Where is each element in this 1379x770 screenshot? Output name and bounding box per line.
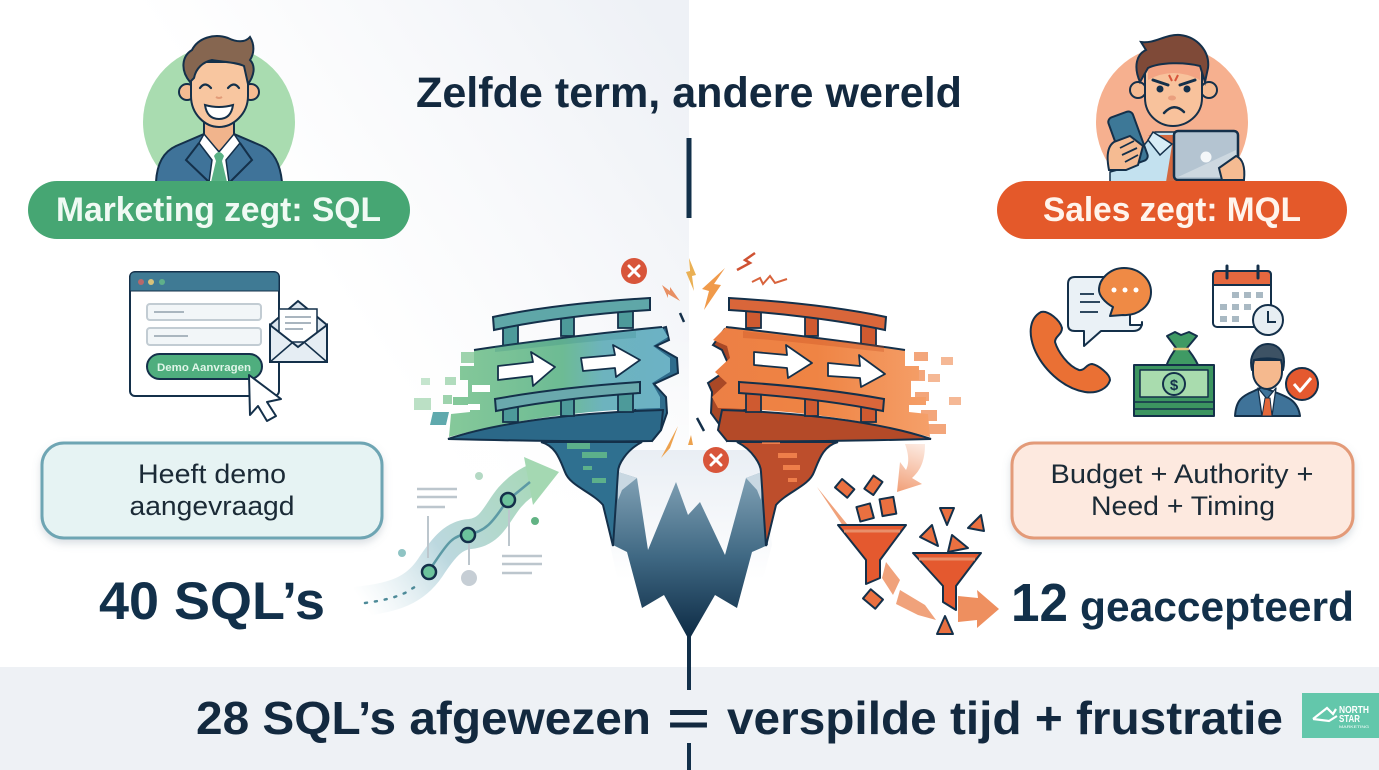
icon: money bag and bills (1134, 332, 1214, 416)
pill: Sales zegt MQL (997, 181, 1347, 239)
box: budget authority need timing: Budget + Authority + (1050, 459, 1314, 489)
box: heeft demo aangevraagd: Heeft demo (138, 459, 286, 489)
icon: error marker bottom (703, 447, 729, 473)
icon: chat bubbles (1068, 268, 1151, 346)
icon: arrow down to funnels (897, 444, 925, 492)
box: heeft demo aangevraagd (42, 443, 382, 538)
stat: 12 geaccepteerd: 12 (1011, 573, 1068, 633)
logo: North Star Marketing: STAR (1339, 714, 1361, 725)
arrows (754, 345, 812, 378)
character: frustrated sales person (1096, 35, 1248, 198)
icon: telephone handset (1031, 312, 1110, 392)
icon: two funnels with falling pieces (835, 476, 984, 634)
icon: mouse cursor (249, 375, 281, 421)
box: heeft demo aangevraagd: aangevraagd (130, 491, 294, 521)
arrows (498, 352, 555, 386)
deck shading strip (743, 331, 884, 352)
illustration: chasm (610, 450, 772, 640)
upper railing (503, 306, 633, 346)
white gap blocks (468, 385, 490, 410)
title: Zelfde term, andere wereld (416, 69, 962, 117)
stat: 40 SQLs: 40 SQL’s (99, 572, 325, 631)
box: budget authority need timing: Need + Timing (1091, 491, 1275, 521)
deck band (448, 410, 663, 441)
logo: North Star Marketing (1302, 693, 1379, 738)
pillar (541, 442, 642, 546)
icon: envelope (270, 301, 327, 362)
chart: rising green path with arrow (355, 457, 559, 603)
illustration: left broken bridge (green/teal) (414, 298, 678, 546)
icon: lightning and cracks (661, 253, 787, 458)
pill: Sales zegt MQL: Sales zegt: MQL (1043, 191, 1301, 229)
pixel debris left (414, 352, 474, 425)
broken edge (630, 327, 678, 441)
lower railing (746, 392, 876, 422)
logo: North Star Marketing: MARKETING (1339, 724, 1369, 729)
deck shading strip (495, 331, 636, 352)
icon: demo request form (130, 272, 279, 396)
stat: 12 geaccepteerd (1011, 573, 1354, 633)
center divider line (686, 138, 692, 770)
pill: Marketing zegt SQL (28, 181, 410, 239)
pill: Marketing zegt SQL: Marketing zegt: SQL (56, 191, 381, 229)
stat: 12 geaccepteerd: geaccepteerd (1080, 583, 1354, 630)
deck (449, 327, 670, 437)
broken edge (708, 330, 750, 441)
icon: orange dashed flow arrow (817, 487, 999, 628)
summary: afgewezen equals wasted time: = (667, 692, 710, 744)
summary: afgewezen equals wasted time: 28 SQL’s afgewezen (196, 692, 651, 744)
logo: North Star Marketing: NORTH (1339, 705, 1369, 716)
summary: afgewezen equals wasted time: verspilde tijd + frustratie (727, 692, 1283, 744)
box: budget authority need timing (1012, 443, 1353, 538)
deck (712, 327, 930, 437)
deck band (718, 410, 931, 441)
pixel debris right (911, 352, 961, 434)
icon: calendar with clock (1213, 266, 1283, 335)
summary: afgewezen equals wasted time (196, 692, 1283, 744)
icon: decision maker with check badge (1235, 344, 1318, 416)
illustration: right broken bridge (orange) (708, 298, 961, 546)
pillar (737, 442, 838, 546)
lower railing (503, 392, 633, 422)
upper railing (746, 306, 876, 346)
icon: error marker top (621, 258, 647, 284)
character: happy marketer (143, 36, 295, 198)
icon: demo request form: Demo Aanvragen (157, 362, 251, 374)
icon: money bag and bills: $ (1170, 377, 1179, 394)
